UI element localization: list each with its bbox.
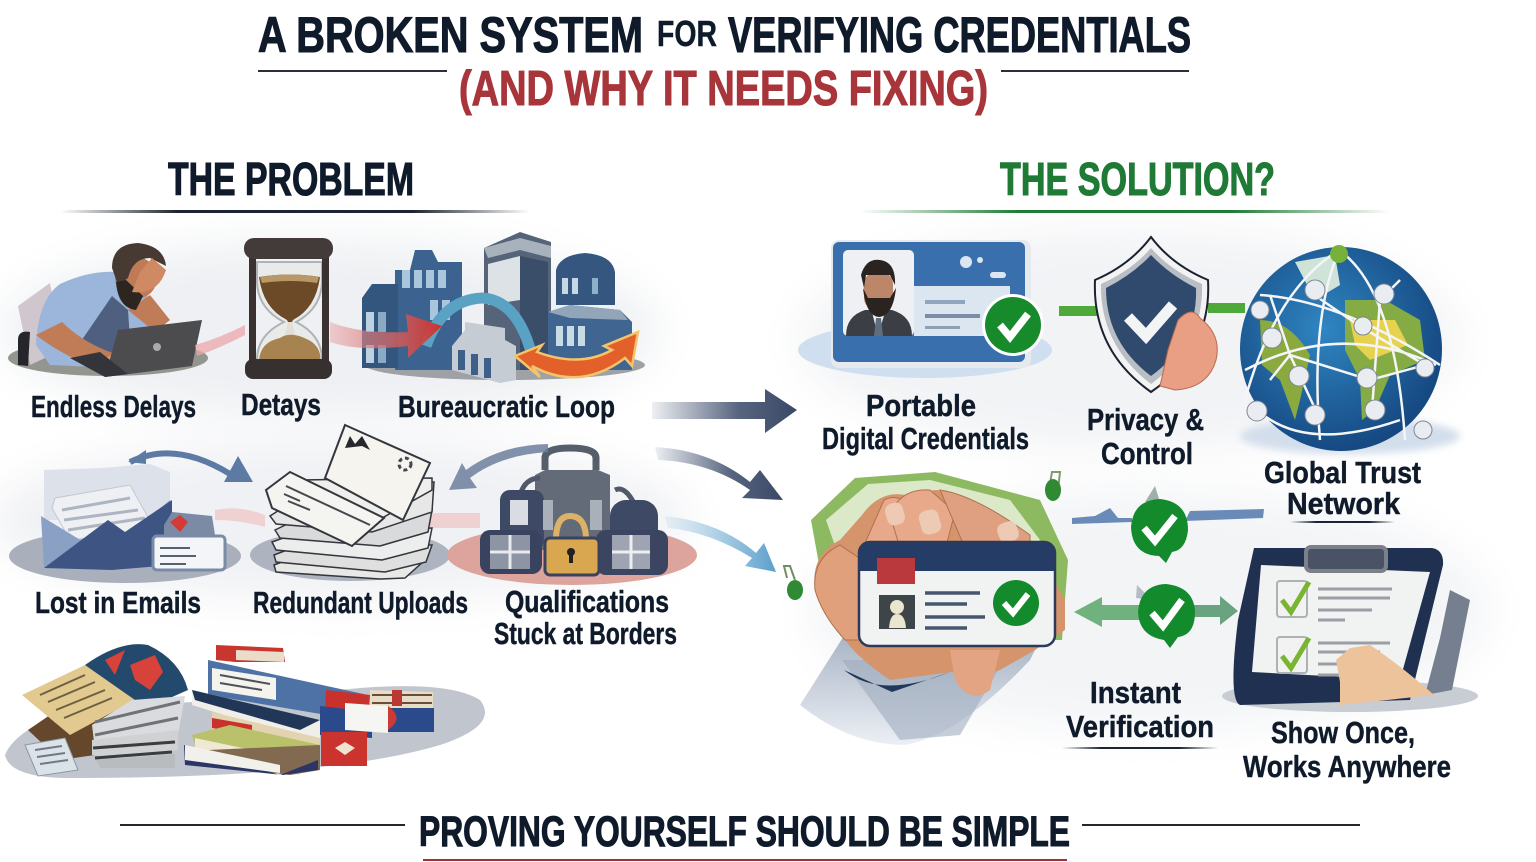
icon: verification check bottom (1074, 584, 1238, 648)
icon: hand holding credential card (784, 472, 1068, 745)
icon: clipboard with checks (1222, 547, 1478, 712)
arrow: to solution curved (655, 447, 783, 500)
label: Instant (1090, 675, 1181, 710)
heading: the problem: THE PROBLEM (168, 153, 414, 205)
icon: globe network (1240, 245, 1460, 454)
panel: problems (5, 232, 697, 778)
label: Bureaucratic Loop (398, 389, 615, 424)
icon: shield and hand (1095, 237, 1217, 392)
icon: envelope with emails (9, 450, 253, 583)
title: FOR (657, 13, 717, 54)
title (258, 7, 1191, 72)
heading: the problem (60, 153, 530, 213)
label: Show Once, (1271, 715, 1415, 750)
title: A BROKEN SYSTEM (258, 7, 643, 63)
arrow: blue curved (665, 516, 776, 572)
title: VERIFYING CREDENTIALS (728, 7, 1191, 63)
arrow: curved left (449, 444, 548, 490)
icon: stressed man at laptop (8, 243, 208, 377)
icon: hourglass (244, 238, 333, 379)
heading: the solution (860, 153, 1390, 213)
footer tagline: PROVING YOURSELF SHOULD BE SIMPLE (419, 808, 1070, 856)
panel: solutions (784, 237, 1478, 784)
icon: verification check top (1072, 486, 1264, 563)
label: Control (1101, 436, 1193, 471)
label: Detays (241, 387, 321, 422)
label: Lost in Emails (35, 585, 201, 620)
icon: digital ID card (798, 240, 1052, 378)
arrow: green connector (1059, 303, 1245, 316)
arrow: red flow from laptop to hourglass (195, 325, 245, 356)
label: Redundant Uploads (253, 585, 468, 620)
arrow: red flow into buildings (330, 314, 442, 358)
label: Network (1287, 486, 1401, 521)
icon: padlocks at border (447, 448, 697, 585)
label: Global Trust (1264, 455, 1421, 490)
icon: paperwork and book pile (5, 644, 485, 778)
label: Works Anywhere (1243, 749, 1451, 784)
label: Verification (1066, 709, 1214, 744)
label: Privacy & (1087, 402, 1204, 437)
label: Portable (866, 388, 976, 423)
subtitle: (AND WHY IT NEEDS FIXING) (459, 62, 988, 116)
icon: paper stack (215, 425, 480, 581)
label: Endless Delays (31, 389, 196, 424)
arrow: to solution straight (652, 389, 797, 433)
label: Digital Credentials (822, 421, 1029, 456)
label: Qualifications (505, 584, 669, 619)
heading: the solution: THE SOLUTION? (1000, 153, 1275, 205)
label: Stuck at Borders (494, 616, 677, 651)
icon: office buildings loop (362, 232, 645, 383)
